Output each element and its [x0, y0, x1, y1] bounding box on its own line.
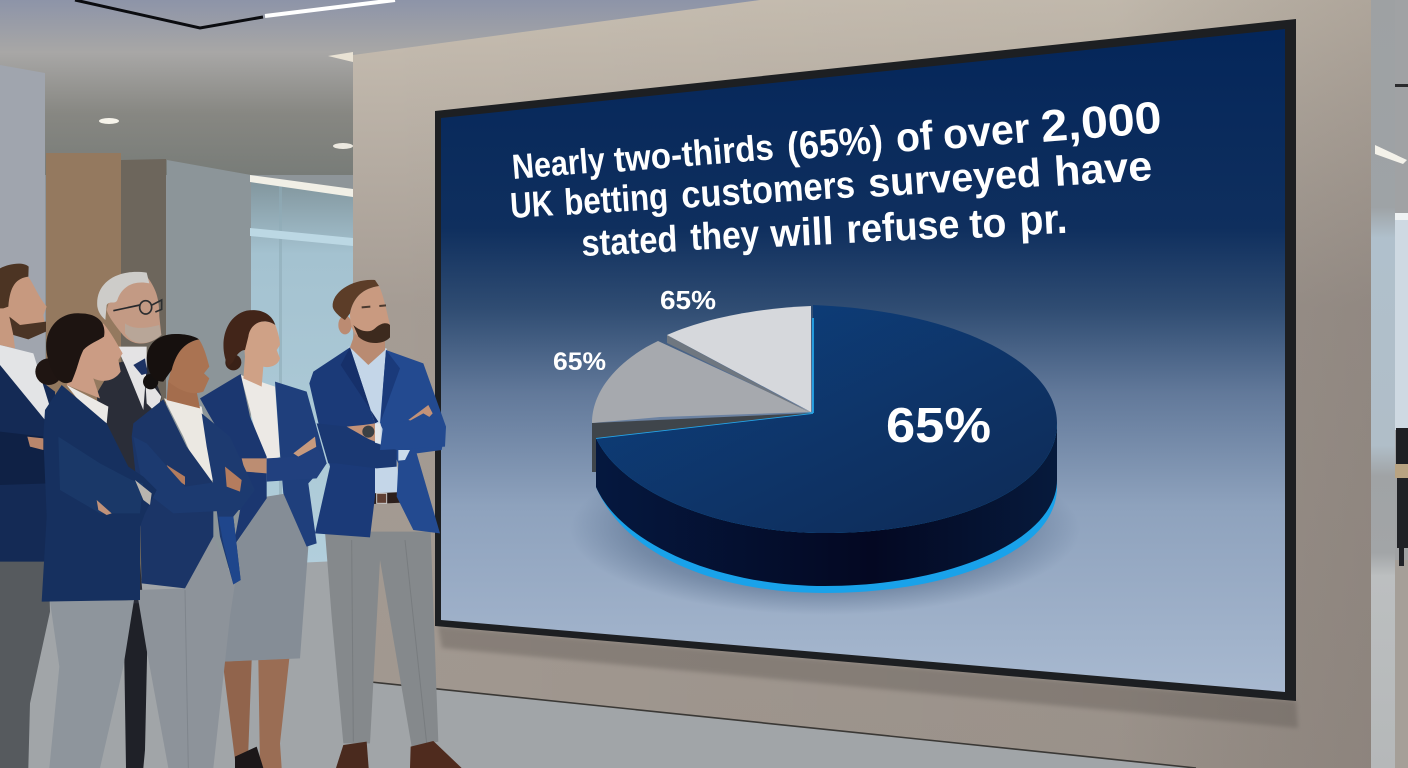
title text: will — [768, 210, 834, 256]
group of people — [0, 264, 462, 768]
slice: mid grey — [592, 341, 811, 423]
title text: surveyed — [867, 151, 1042, 206]
slice: main 65 percent — [596, 305, 1057, 533]
slice side: light wedge — [667, 335, 811, 413]
title text: refuse — [845, 203, 960, 252]
slice: light grey — [667, 306, 811, 412]
person: older man — [97, 272, 162, 768]
title text: two-thirds — [612, 126, 775, 180]
wall with screen — [328, 0, 1408, 768]
title text: customers — [680, 164, 856, 217]
title text — [509, 91, 1163, 264]
slice edge highlights — [596, 318, 813, 438]
pie rim glow — [596, 423, 1057, 593]
label: main: 65% — [886, 399, 991, 453]
person: woman with brown hair — [200, 310, 327, 768]
title text: to — [968, 199, 1007, 247]
person: man at far left — [0, 264, 55, 768]
pie side — [596, 423, 1057, 586]
title text: Nearly — [511, 141, 607, 187]
title text: UK — [509, 182, 554, 226]
person: man in front — [309, 280, 462, 768]
screen frame — [435, 19, 1296, 701]
slice side: dark — [592, 413, 813, 472]
person: woman with curly hair — [35, 313, 157, 768]
person: woman with dark hair — [132, 334, 255, 768]
title text: 2,000 — [1039, 91, 1163, 152]
title text: over — [941, 104, 1031, 158]
pie chart — [553, 285, 1080, 615]
title text: betting — [563, 176, 669, 223]
title text: stated — [580, 218, 678, 264]
label: grey slice: 65% — [553, 348, 606, 376]
title text: of — [894, 112, 935, 161]
screen panel — [441, 29, 1285, 692]
title text: (65%) — [785, 118, 884, 169]
title text: have — [1053, 142, 1153, 195]
title text: they — [689, 214, 760, 259]
label: light slice: 65% — [660, 285, 716, 315]
title text: pr. — [1018, 195, 1068, 244]
